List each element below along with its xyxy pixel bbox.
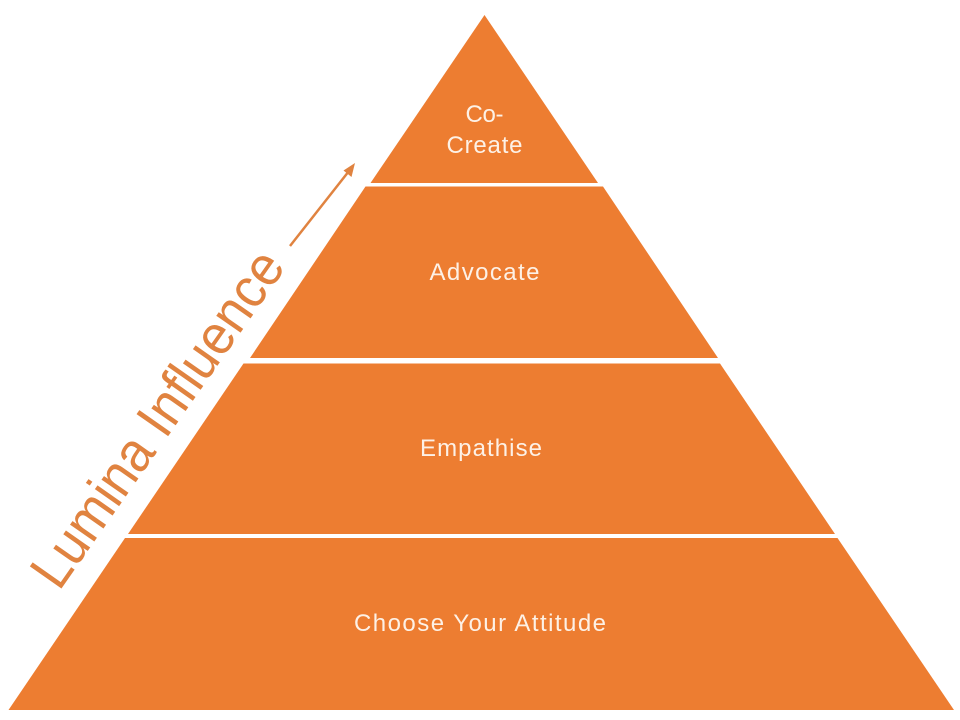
tier 2: Advocate: Advocate [430, 259, 540, 286]
tier 1: Co-Create: Co- [466, 101, 504, 128]
rotated label: Lumina Influence: Lumina Influence [17, 238, 297, 599]
tier 1: Co-Create [370, 15, 598, 183]
tier 3: Empathise: Empathise [420, 435, 542, 462]
tier 1: Co-Create: Create [446, 132, 522, 159]
tier 3: Empathise [128, 364, 835, 534]
tier 4: Choose Your Attitude [8, 538, 954, 710]
tier 4: Choose Your Attitude: Choose Your Attitude [354, 610, 606, 637]
arrow: influence direction [290, 163, 355, 246]
tier 2: Advocate [250, 186, 718, 358]
